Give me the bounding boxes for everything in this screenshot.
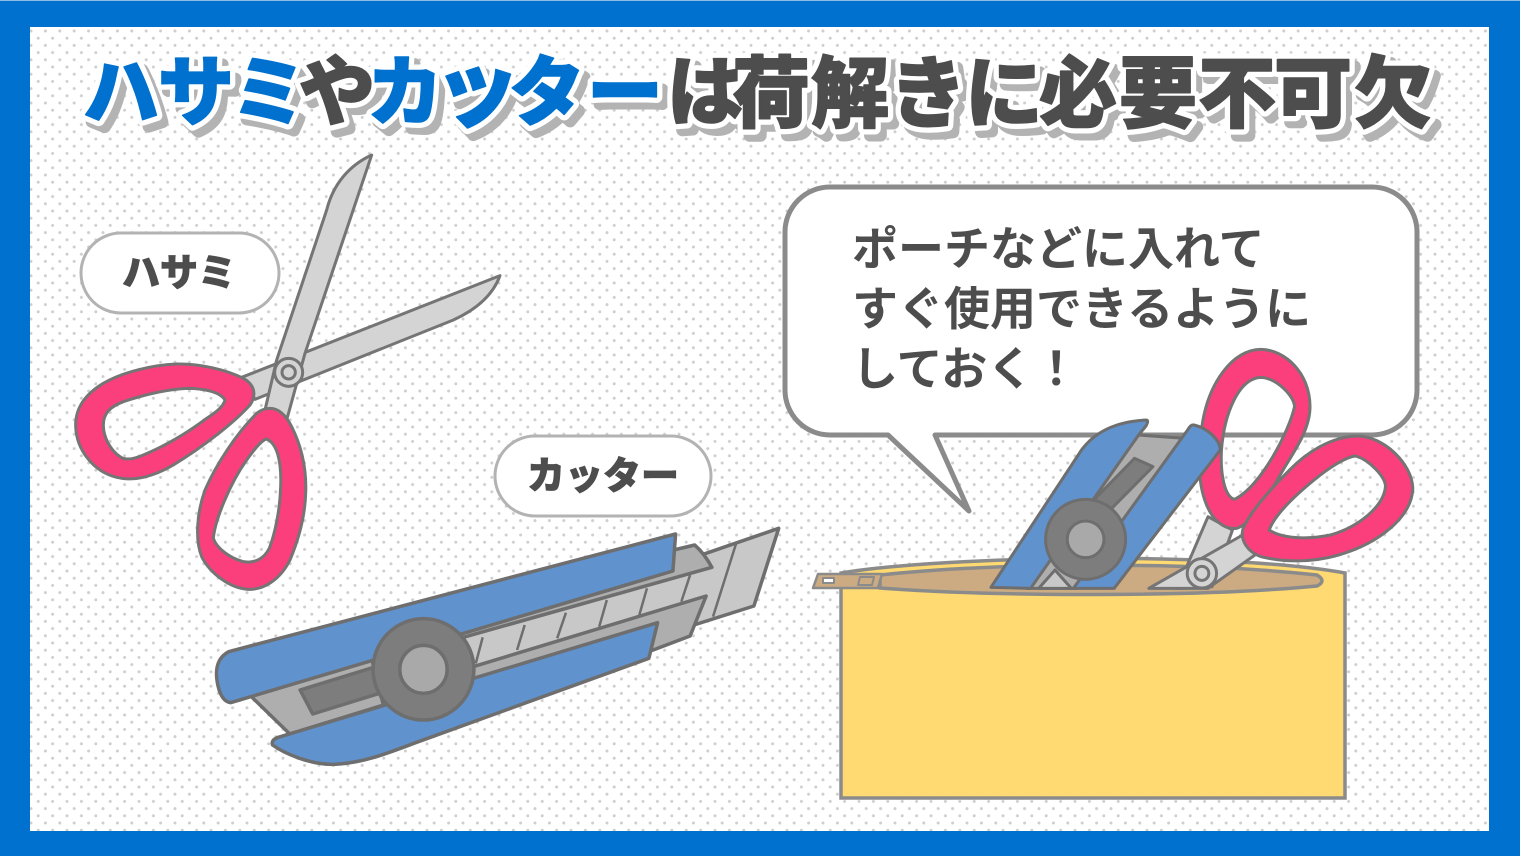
speech bubble — [785, 187, 1417, 511]
title: に — [971, 57, 1049, 145]
title: 解 — [817, 57, 895, 145]
title: 欠 — [1354, 50, 1432, 138]
title: ハ — [83, 51, 159, 136]
title: 欠 — [1354, 50, 1432, 138]
bubble text — [852, 223, 1311, 395]
title: 解 — [811, 50, 889, 138]
title: 可 — [1274, 50, 1352, 138]
label: ハサミ: ハサミ — [122, 253, 236, 295]
title: 可 — [1280, 57, 1358, 145]
title: ッ — [440, 49, 526, 145]
title: 要 — [1125, 57, 1203, 145]
bubble text: しておく！ — [852, 343, 1079, 395]
label: カッター: カッター — [527, 456, 679, 498]
title: ミ — [231, 51, 307, 136]
title: カ — [373, 58, 449, 143]
title: 不 — [1204, 57, 1282, 145]
title: ー — [587, 51, 663, 136]
title: ー — [587, 51, 663, 136]
bubble text: すぐ使用できるように — [852, 283, 1311, 335]
pouch opening — [880, 565, 1322, 595]
title: 必 — [1039, 50, 1117, 138]
title: や — [299, 51, 375, 136]
title: に — [965, 50, 1043, 138]
title: ミ — [237, 58, 313, 143]
zipper tab — [813, 574, 882, 588]
title: サ — [158, 51, 234, 136]
title: き — [889, 50, 967, 138]
title: は — [667, 51, 743, 136]
title: ッ — [434, 42, 520, 138]
title: き — [895, 57, 973, 145]
title: ハ — [83, 51, 159, 136]
label: ハサミ — [81, 233, 279, 313]
title: は — [673, 58, 749, 143]
title: タ — [515, 58, 591, 143]
title: 欠 — [1360, 57, 1438, 145]
title: サ — [158, 51, 234, 136]
title: 要 — [1119, 50, 1197, 138]
title: 必 — [1045, 57, 1123, 145]
title: 不 — [1198, 50, 1276, 138]
title: 不 — [1198, 50, 1276, 138]
icon: scissors — [76, 155, 500, 589]
title: カ — [367, 51, 443, 136]
title: 荷 — [732, 50, 810, 138]
title: ミ — [231, 51, 307, 136]
title: 可 — [1274, 50, 1352, 138]
pouch — [813, 558, 1345, 798]
title: は — [667, 51, 743, 136]
title: ッ — [434, 42, 520, 138]
icon: utility knife — [216, 528, 779, 764]
title: き — [889, 50, 967, 138]
title: ハ — [89, 58, 165, 143]
title: タ — [509, 51, 585, 136]
title: 荷 — [738, 57, 816, 145]
title: や — [305, 58, 381, 143]
title: 解 — [811, 50, 889, 138]
title: 必 — [1039, 50, 1117, 138]
icon: scissors in pouch — [1149, 349, 1413, 588]
title: 荷 — [732, 50, 810, 138]
title: ー — [593, 58, 669, 143]
title: サ — [164, 58, 240, 143]
title: 要 — [1119, 50, 1197, 138]
title: や — [299, 51, 375, 136]
label: カッター — [495, 436, 711, 516]
icon: utility knife in pouch — [991, 420, 1220, 588]
bubble text: ポーチなどに入れて — [852, 223, 1265, 275]
title: カ — [367, 51, 443, 136]
title: に — [965, 50, 1043, 138]
title: タ — [509, 51, 585, 136]
title — [83, 42, 1438, 145]
